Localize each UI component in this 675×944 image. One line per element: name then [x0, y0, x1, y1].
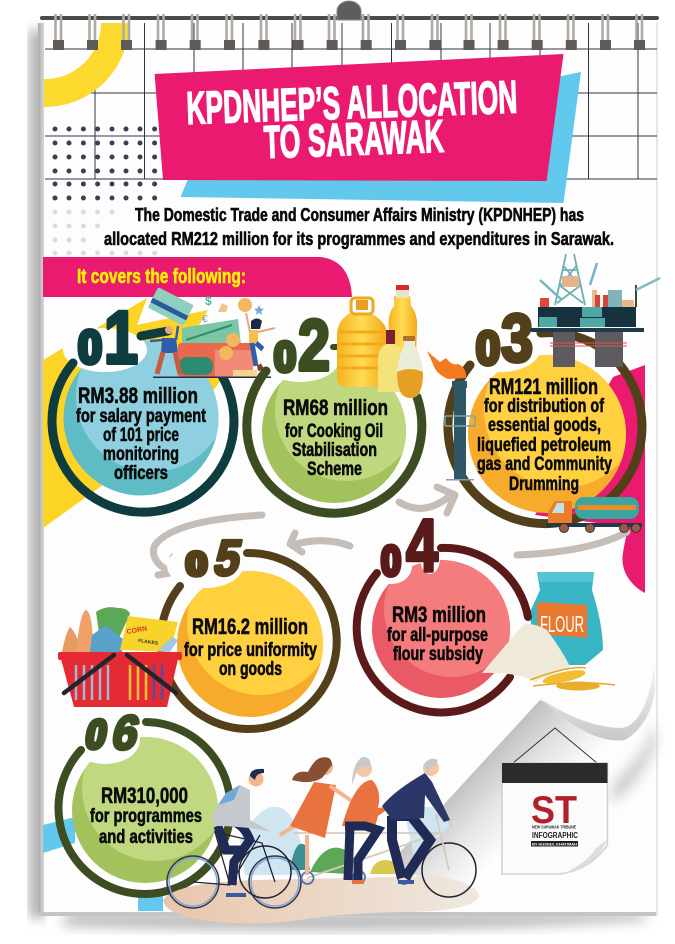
flour bag: FLOUR: [540, 611, 584, 637]
text: RM3 million: [392, 602, 486, 627]
woman in orange dress: [280, 757, 362, 875]
woman in orange jacket: [342, 757, 392, 884]
item 02: cooking oil: [247, 285, 423, 513]
flare stack: [427, 351, 475, 480]
item 01: salary payment: [52, 287, 275, 512]
text: [387, 602, 488, 665]
circle fill: [64, 340, 218, 496]
second wheel and rear riders' frame: [239, 815, 476, 898]
item 05: price uniformity: [58, 530, 337, 729]
text: RM3.88 million: [78, 383, 198, 408]
number: 4: [406, 504, 438, 587]
blue backing shape: [180, 72, 581, 203]
arrow 05 loop: [154, 515, 262, 575]
number: 6: [108, 706, 144, 760]
text: RM16.2 million: [192, 614, 308, 639]
arrow 02 to 03: [399, 487, 455, 513]
number: [476, 300, 533, 376]
text: essential goods,: [488, 415, 601, 436]
spiral binding: [40, 1, 659, 50]
ring: [59, 722, 231, 894]
number: 2: [298, 306, 330, 386]
text: Scheme: [307, 459, 362, 480]
ring: [247, 371, 422, 513]
oil bottles: [337, 285, 423, 398]
text: for programmes: [90, 806, 202, 827]
text: Stabilisation: [292, 440, 377, 461]
ring: [161, 553, 337, 729]
text: for distribution of: [484, 396, 604, 417]
intro text: [104, 205, 614, 249]
circle fill: [372, 560, 510, 698]
text: [76, 383, 207, 484]
text: [90, 783, 202, 848]
author name: BY HUSNUL KHATIMAH: [532, 842, 577, 846]
cyclists illustration: [163, 757, 479, 924]
page curl: [389, 653, 656, 898]
text: officers: [114, 463, 168, 484]
text: on goods: [219, 659, 282, 680]
item 04: flour subsidy: [357, 504, 615, 712]
text: liquefied petroleum: [477, 435, 611, 456]
yellow arc decoration: [44, 23, 128, 107]
background grid: [45, 23, 657, 179]
number: 0: [82, 712, 110, 757]
arrow 04 to 05: [290, 533, 350, 552]
infographic label: INFOGRAPHIC: [532, 831, 578, 840]
tag body: [502, 763, 608, 874]
text: gas and Community: [477, 454, 612, 475]
blue stripe decoration: [43, 817, 163, 911]
grocery basket: CORN: [126, 625, 148, 636]
title text: [186, 70, 518, 168]
text: for price uniformity: [184, 640, 317, 661]
curl shadow: [610, 720, 656, 805]
curl underside: [389, 700, 647, 898]
text: monitoring: [103, 444, 179, 465]
number: 0: [274, 333, 296, 380]
title text: TO SARAWAK: [263, 110, 445, 168]
number: 0: [476, 322, 500, 374]
number: 1: [104, 296, 138, 379]
text: and activities: [99, 827, 193, 848]
title banner: [155, 54, 581, 203]
flow arrows: [154, 487, 627, 575]
tag corner fold: [563, 840, 607, 874]
curl front: [540, 653, 655, 740]
tanker truck: [546, 497, 642, 532]
man in navy jacket: [382, 759, 450, 884]
text: Drumming: [509, 474, 579, 495]
number: 0: [186, 546, 207, 582]
ground: [163, 876, 479, 924]
binding rings: [56, 14, 642, 42]
oil rig: [531, 254, 660, 367]
text: for salary payment: [76, 406, 207, 427]
text: [184, 614, 317, 680]
number: 3: [501, 300, 533, 376]
hanging pin: [337, 1, 361, 20]
item 03: essential goods: [427, 254, 660, 532]
number: 0: [78, 321, 102, 373]
text: [477, 374, 612, 495]
circle fill: [262, 367, 406, 503]
grocery basket: [58, 607, 182, 707]
flour pile and wheat: [482, 624, 615, 690]
ring: [448, 333, 642, 524]
ST logo: ST: [531, 789, 577, 832]
text: RM310,000: [101, 783, 188, 808]
text: RM121 million: [489, 374, 598, 399]
pink panel: [155, 54, 564, 181]
tag black bar: [502, 763, 608, 783]
author strip: [531, 841, 578, 846]
money illustration: €: [202, 314, 208, 325]
scenery: [240, 807, 301, 875]
ST calendar tag: [502, 728, 608, 874]
text: for Cooking Oil: [285, 421, 383, 442]
ring: [357, 548, 528, 712]
ring: [52, 331, 234, 512]
hanging string: [513, 728, 597, 763]
text: flour subsidy: [393, 644, 483, 665]
text: [283, 395, 388, 480]
circle fill: [177, 571, 323, 717]
number: 0: [381, 537, 401, 584]
money illustration: [148, 287, 275, 378]
text: RM68 million: [283, 395, 388, 420]
number: 5: [210, 530, 247, 586]
number: [274, 306, 330, 386]
yellow lightning shape: [43, 298, 225, 528]
number: [186, 530, 247, 586]
number: [381, 504, 438, 587]
front cyclist: [167, 769, 301, 908]
pink shape behind item 03: [535, 365, 645, 593]
wire bar: [40, 16, 659, 20]
subheading banner: [43, 257, 352, 297]
item 06: programmes and activities: [59, 706, 231, 894]
text: for all-purpose: [387, 625, 488, 646]
arrow 03 to 04: [517, 532, 627, 555]
circle fill: [72, 737, 218, 883]
number: [82, 706, 144, 760]
tagline: NEW SARAWAK TRIBUNE: [532, 824, 576, 830]
money illustration: $: [205, 294, 212, 308]
grocery basket: FLAKES: [138, 638, 159, 647]
number: [78, 296, 138, 379]
flour bag: [530, 572, 603, 665]
dot pattern: [55, 129, 155, 253]
text: of 101 price: [103, 425, 179, 446]
circle fill: [468, 355, 626, 513]
subheading banner: It covers the following:: [77, 266, 246, 288]
